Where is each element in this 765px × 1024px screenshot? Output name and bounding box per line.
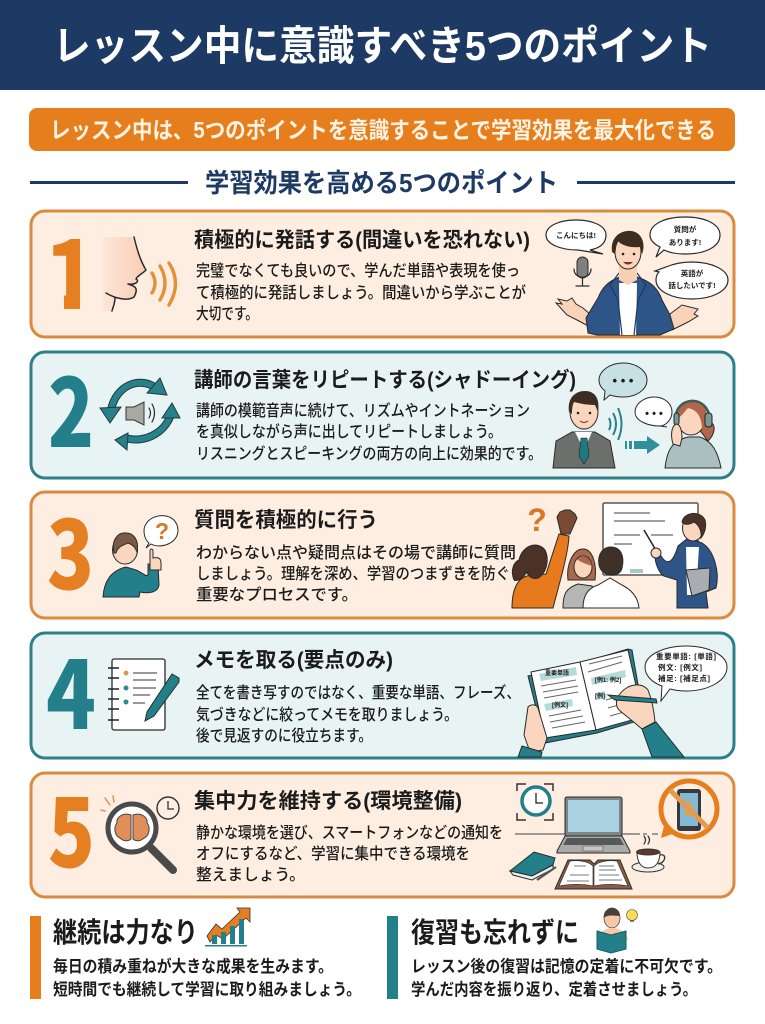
point 3 body: わからない点や疑問点はその場で講師に質問 bbox=[196, 543, 516, 562]
number 5: 5 bbox=[48, 759, 95, 895]
icon: person asking bbox=[103, 516, 178, 597]
speech bubbles bbox=[546, 217, 728, 299]
writing hand and pen bbox=[616, 685, 655, 729]
point 5 heading: 集中力を維持する(環境整備) bbox=[194, 790, 462, 813]
notebook and pencil bbox=[510, 852, 556, 880]
number 3: 3 bbox=[47, 481, 94, 617]
point 4 body: 全てを書き写すのではなく、重要な単語、フレーズ、 bbox=[196, 683, 520, 702]
icon: magnifier with brain bbox=[101, 796, 179, 870]
coffee cup bbox=[632, 836, 665, 872]
illustration: speaking teacher: 英語が bbox=[681, 268, 704, 278]
number 2: 2 bbox=[48, 339, 94, 475]
icon: growth chart bbox=[205, 908, 250, 946]
illustration: shadowing conversation bbox=[553, 363, 721, 468]
point 5 body: オフにするなど、学習に集中できる環境を bbox=[196, 845, 470, 863]
number 4: 4 bbox=[46, 621, 96, 757]
illustration: shadowing conversation: • • • bbox=[645, 408, 663, 420]
illustration: shadowing conversation: • • • bbox=[613, 373, 634, 388]
man student from behind bbox=[583, 578, 639, 608]
teacher at board bbox=[644, 530, 657, 552]
holding hand bbox=[524, 705, 547, 752]
illustration: taking notes in a book bbox=[518, 646, 727, 757]
woman student bbox=[563, 584, 598, 608]
point 4 body: 気づきなどに絞ってメモを取りましょう。 bbox=[196, 706, 458, 724]
point 1 heading: 積極的に発話する(間違いを恐れない) bbox=[194, 229, 530, 252]
panel: point 5 bbox=[31, 759, 734, 897]
point 1 body bbox=[196, 262, 526, 323]
clock with brackets bbox=[517, 784, 553, 820]
laptop bbox=[557, 797, 630, 853]
point 3 body: しましょう。理解を深め、学習のつまずきを防ぐ bbox=[196, 565, 510, 583]
illustration: speaking teacher: あります! bbox=[669, 238, 701, 247]
panel: point 4 bbox=[31, 621, 734, 758]
icon: person asking: ? bbox=[155, 518, 169, 544]
footer: continuation: 継続は力なり bbox=[53, 917, 198, 948]
icon: notebook and pen bbox=[108, 659, 179, 730]
panel: point 3 bbox=[31, 481, 734, 618]
point 5 body: 静かな環境を選び、スマートフォンなどの通知を bbox=[196, 824, 503, 842]
illustration: taking notes in a book: 補足: [補足点] bbox=[658, 673, 710, 683]
illustration: taking notes in a book: [例] bbox=[595, 692, 605, 700]
point 3 heading: 質問を積極的に行う bbox=[194, 509, 378, 532]
title: レッスン中に意識すべき5つのポイント bbox=[53, 23, 712, 69]
illustration: taking notes in a book: [例1: 例2] bbox=[595, 676, 621, 684]
panel: point 1 bbox=[31, 201, 734, 337]
student with raised hand bbox=[512, 534, 569, 608]
illustration: taking notes in a book: [例文] bbox=[552, 701, 568, 709]
illustration: taking notes in a book: 例文: [例文] bbox=[658, 662, 702, 672]
point 3 body bbox=[196, 543, 516, 604]
illustration: focused study desk bbox=[510, 781, 717, 889]
point 4 body bbox=[196, 683, 520, 745]
illustration: speaking teacher: 話したいです! bbox=[668, 280, 716, 290]
footer: continuation: 毎日の積み重ねが大きな成果を生みます。 bbox=[53, 956, 333, 976]
point 2 heading: 講師の言葉をリピートする(シャドーイング) bbox=[194, 368, 576, 392]
summary banner bbox=[29, 108, 735, 151]
icon: speaking profile bbox=[103, 237, 176, 311]
arrow bbox=[625, 436, 660, 454]
point 3 body: 重要なプロセスです。 bbox=[196, 586, 358, 604]
footer: continuation: 短時間でも継続して学習に取り組みましょう。 bbox=[53, 979, 361, 999]
footer: review: 学んだ内容を振り返り、定着させましょう。 bbox=[411, 979, 697, 999]
point 1 body: て積極的に発話しましょう。間違いから学ぶことが bbox=[196, 283, 526, 302]
point 2 body: リスニングとスピーキングの両方の向上に効果的です。 bbox=[196, 445, 542, 463]
point 1 body: 完璧でなくても良いので、学んだ単語や表現を使っ bbox=[196, 262, 520, 280]
section heading: 学習効果を高める5つのポイント bbox=[205, 168, 558, 198]
teacher bbox=[556, 298, 592, 328]
point 4 body: 後で見返すのに役立ちます。 bbox=[196, 727, 372, 745]
footer: review bbox=[387, 908, 722, 999]
point 4 heading: メモを取る(要点のみ) bbox=[194, 649, 393, 672]
illustration: classroom question bbox=[512, 502, 717, 608]
icon: repeat arrows bbox=[100, 378, 180, 450]
section heading bbox=[30, 168, 735, 198]
illustration: speaking teacher: 質問が bbox=[674, 224, 697, 234]
point 2 body: 講師の模範音声に続けて、リズムやイントネーション bbox=[196, 401, 530, 420]
icon: reading person with bulb bbox=[597, 908, 638, 953]
footer: review: 復習も忘れずに bbox=[411, 917, 579, 948]
footer: review: レッスン後の復習は記憶の定着に不可欠です。 bbox=[411, 956, 722, 976]
illustration: speaking teacher bbox=[546, 217, 728, 335]
panel: point 2 bbox=[31, 339, 734, 478]
woman with headset bbox=[665, 437, 721, 468]
point 1 body: 大切です。 bbox=[196, 305, 258, 323]
illustration: speaking teacher: こんにちは! bbox=[556, 231, 596, 240]
whiteboard bbox=[603, 503, 698, 575]
open book bbox=[555, 860, 632, 889]
no smartphone badge bbox=[661, 781, 717, 838]
illustration: taking notes in a book: 重要単語: [単語] bbox=[656, 651, 716, 661]
point 2 body: を真似しながら声に出してリピートしましょう。 bbox=[196, 422, 502, 441]
notes bubble bbox=[645, 646, 727, 701]
footer: continuation bbox=[30, 908, 361, 999]
question mark: ? bbox=[527, 502, 547, 538]
sound waves bbox=[609, 408, 622, 440]
point 5 body bbox=[196, 824, 503, 884]
illustration: taking notes in a book: 重要単語 bbox=[545, 669, 569, 677]
microphone bbox=[574, 257, 591, 286]
point 5 body: 整えましょう。 bbox=[196, 866, 305, 884]
point 2 body bbox=[196, 401, 542, 463]
man in suit bbox=[553, 432, 615, 468]
number 1: 1 bbox=[44, 201, 101, 337]
header band bbox=[0, 0, 765, 90]
